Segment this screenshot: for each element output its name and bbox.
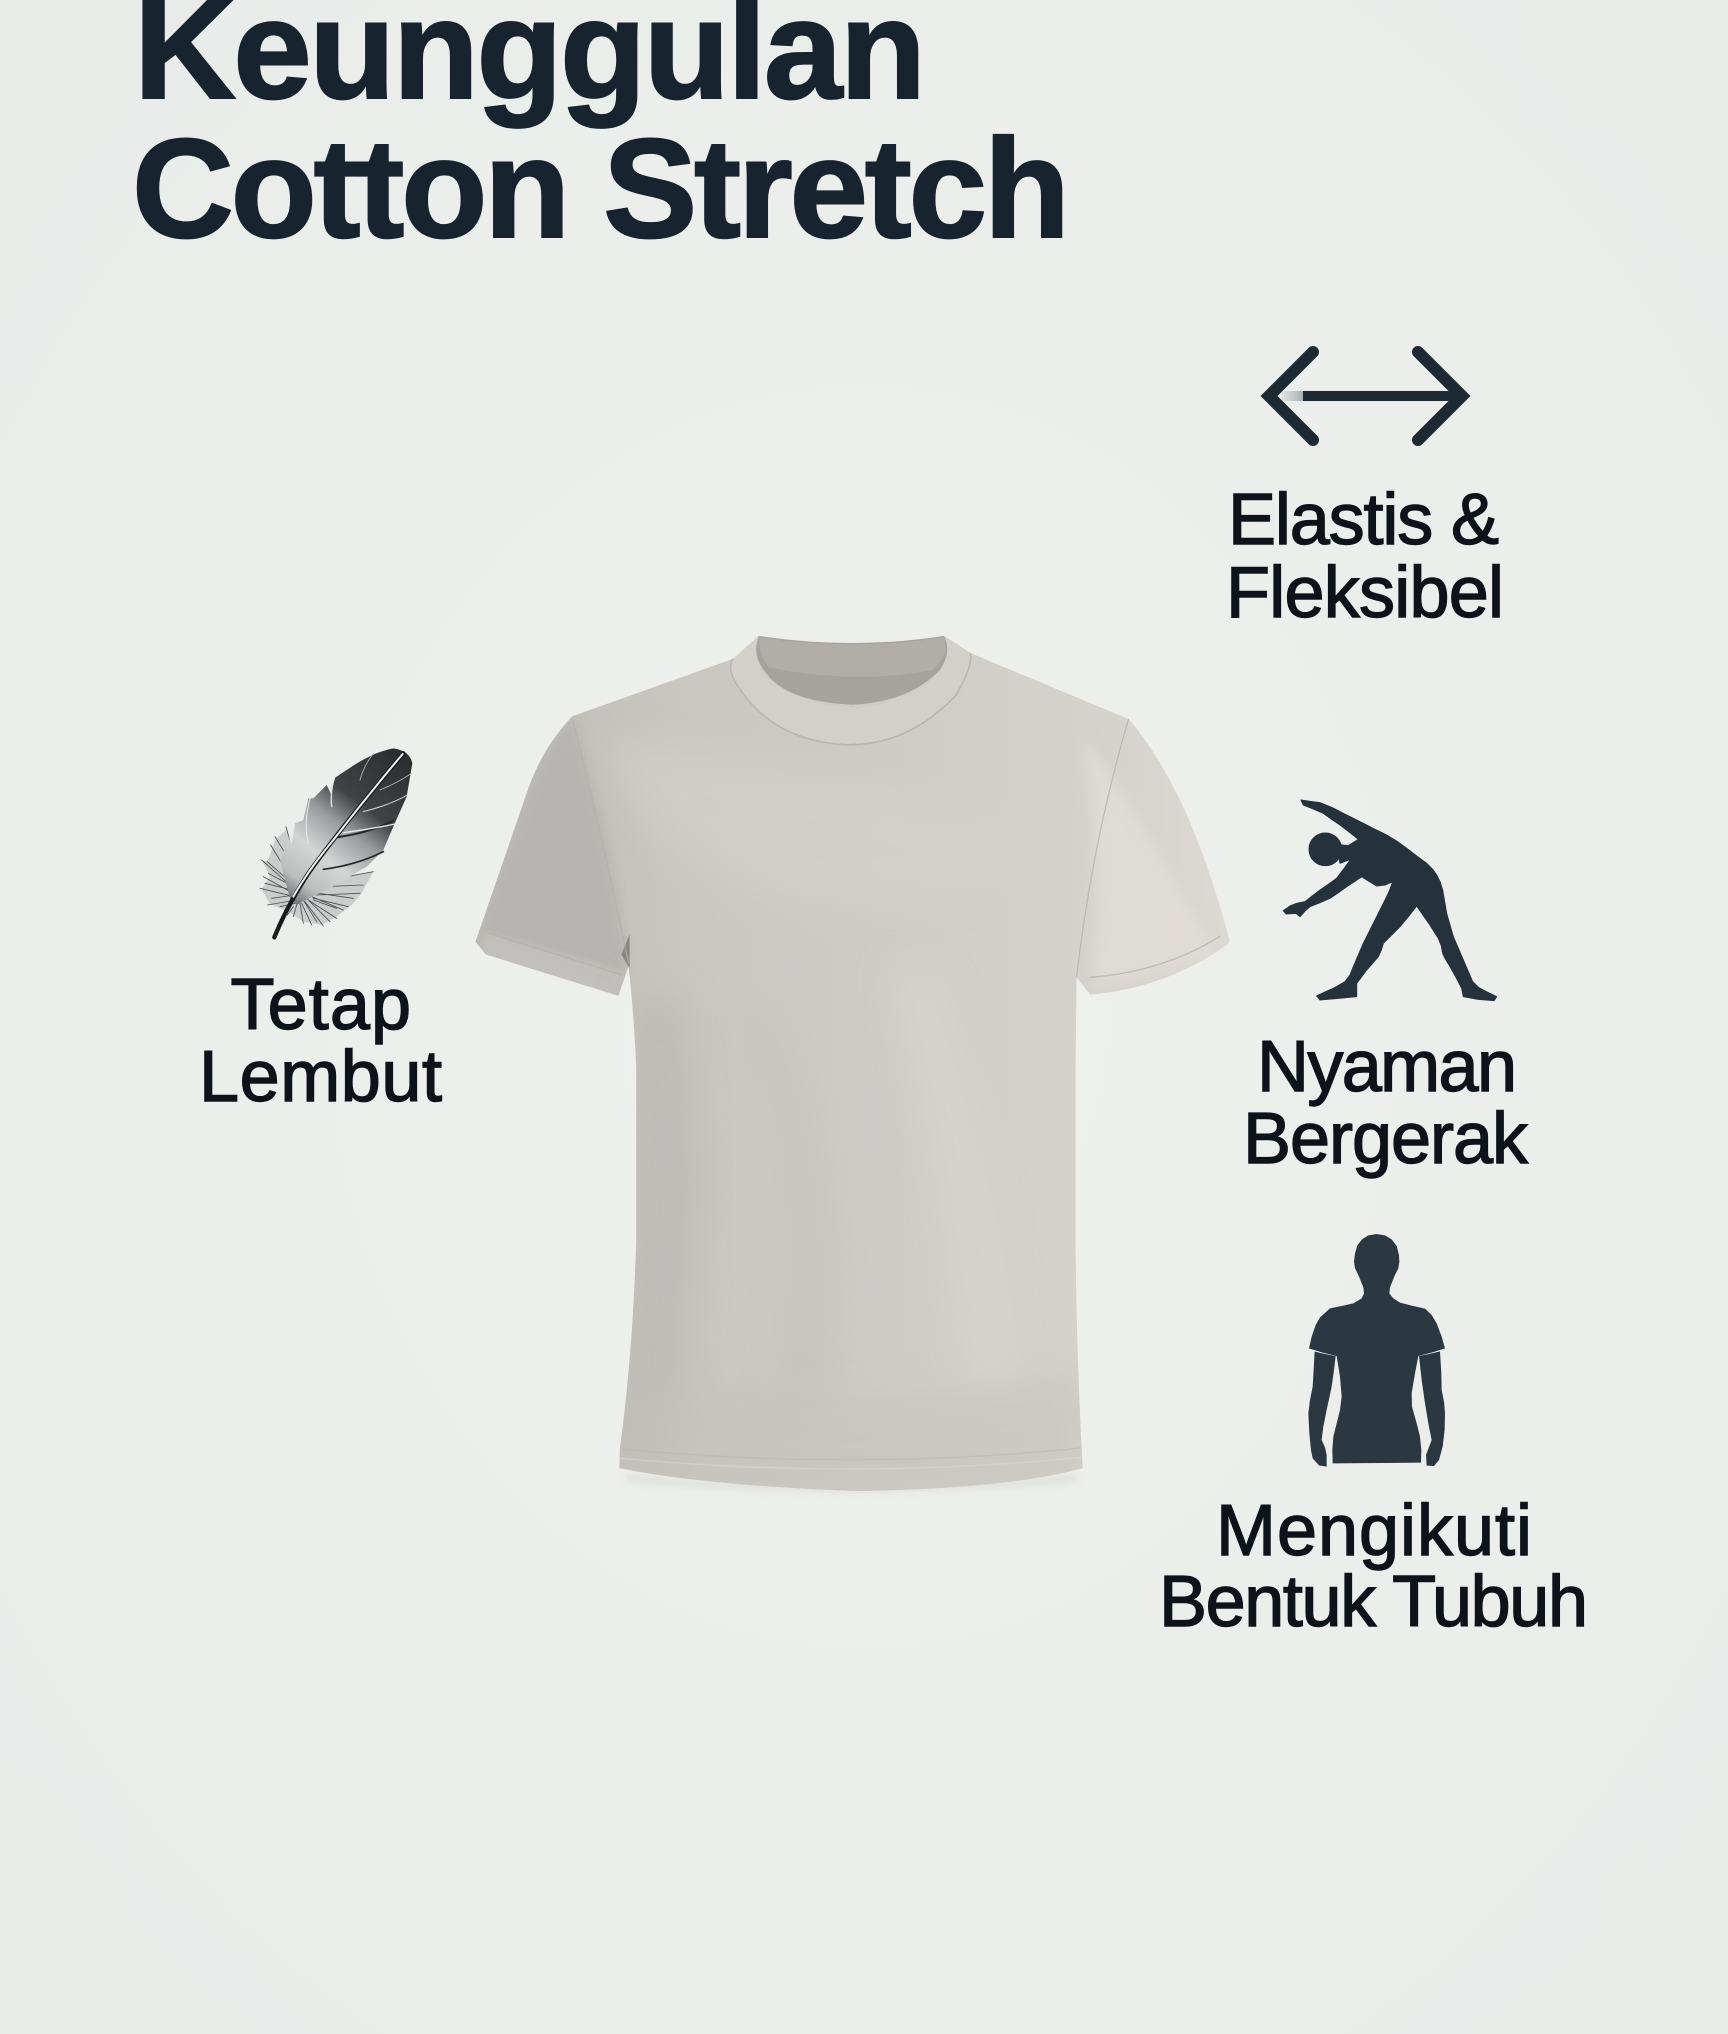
label: Tetap Lembut: Tetap (230, 965, 411, 1045)
label: Elastis & Fleksibel: Elastis & (1228, 480, 1499, 560)
shirt shading (476, 716, 1215, 1494)
left arm (1308, 1352, 1336, 1467)
feather fringe (260, 827, 373, 926)
label: Nyaman Bergerak: Bergerak (1243, 1099, 1529, 1179)
label: Nyaman Bergerak (1243, 1027, 1529, 1179)
figure head (1309, 833, 1342, 866)
shirt body (476, 636, 1230, 1491)
label: Mengikuti Bentuk Tubuh (1159, 1491, 1588, 1642)
label: Tetap Lembut (199, 965, 442, 1117)
feather quill (274, 753, 403, 937)
feather streaks (306, 753, 412, 869)
label: Mengikuti Bentuk Tubuh: Bentuk Tubuh (1159, 1562, 1588, 1642)
figure body (1283, 800, 1497, 1001)
label: Tetap Lembut: Lembut (199, 1037, 442, 1117)
icon: feather (260, 748, 412, 937)
shirt back neck band (759, 638, 946, 677)
right arm (1419, 1351, 1445, 1466)
shirt shadow (626, 1474, 1078, 1493)
shirt collar (731, 636, 971, 745)
icon: stretching figure (1283, 800, 1497, 1001)
t-shirt illustration (476, 636, 1230, 1494)
icon: double arrow (1269, 352, 1462, 440)
label: Elastis & Fleksibel: Fleksibel (1226, 553, 1504, 633)
shirt collar edge (731, 653, 971, 745)
feather soft fringe (262, 830, 373, 925)
label: Mengikuti Bentuk Tubuh: Mengikuti (1216, 1491, 1532, 1571)
icon: body silhouette (1308, 1234, 1445, 1467)
title: Cotton Stretch (132, 109, 1070, 267)
label: Nyaman Bergerak: Nyaman (1257, 1027, 1517, 1107)
label: Elastis & Fleksibel (1226, 480, 1504, 633)
shirt seams (487, 719, 1220, 1469)
title (132, 0, 1070, 267)
feather vane (280, 748, 412, 905)
torso and head (1309, 1234, 1445, 1463)
shirt inner neck (748, 636, 960, 728)
